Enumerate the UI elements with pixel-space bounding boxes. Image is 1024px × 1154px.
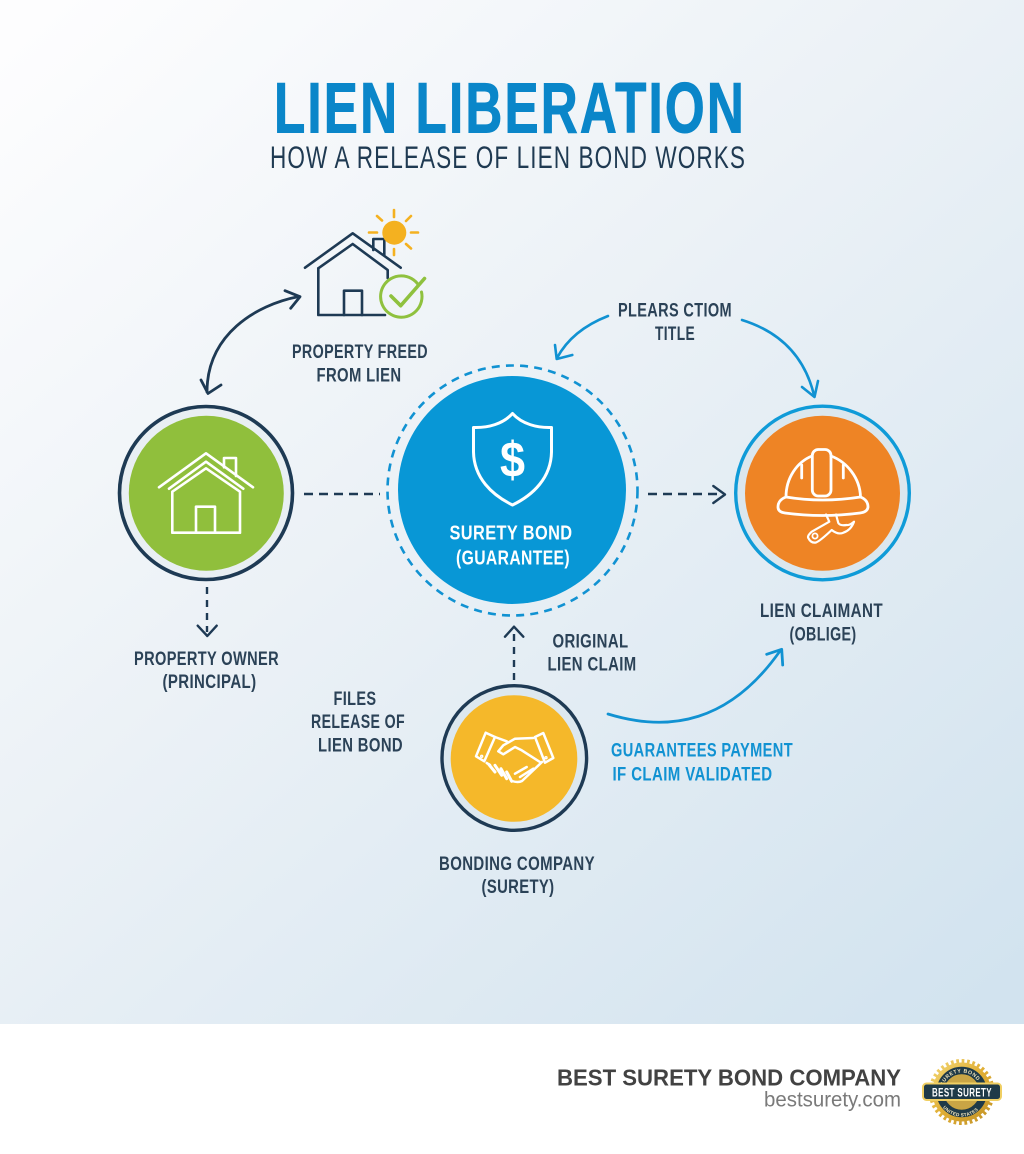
label: guarantees payment: IF CLAIM VALIDATED xyxy=(612,764,772,786)
logo: gold seal: BEST SURETY xyxy=(932,1086,992,1100)
dashed connector: owner to bond xyxy=(304,493,380,495)
label: property owner: (PRINCIPAL) xyxy=(162,671,256,693)
label: lien claimant: (OBLIGE) xyxy=(790,624,856,646)
arrow: surety up to bond xyxy=(505,627,523,680)
logo: gold seal: UNITED STATES xyxy=(943,1106,978,1116)
arrow: bond to claimant xyxy=(648,486,725,503)
label: clear title: PLEARS CTIOM xyxy=(618,300,732,322)
label: surety bond: (GUARANTEE) xyxy=(456,546,570,570)
label: bonding company: (SURETY) xyxy=(482,876,554,898)
label: surety bond xyxy=(450,522,572,570)
label: bonding company: BONDING COMPANY xyxy=(439,853,595,875)
label: lien claimant xyxy=(760,600,883,646)
arrow: title to claimant xyxy=(742,320,818,397)
icon: hard hat and wrench xyxy=(778,450,868,543)
arrow: owner to freed property xyxy=(201,291,300,394)
arrow: surety to claimant xyxy=(608,649,783,722)
label: property freed: PROPERTY FREED xyxy=(292,341,428,363)
label: clear title xyxy=(618,300,732,345)
label: files release: LIEN BOND xyxy=(318,734,403,756)
label: guarantees payment: GUARANTEES PAYMENT xyxy=(611,740,793,762)
node: property owner xyxy=(120,406,292,580)
node: lien claimant xyxy=(736,406,909,580)
icon: house xyxy=(159,453,253,533)
icon: shield with dollar xyxy=(474,414,552,505)
label: original lien claim xyxy=(548,630,636,676)
label: original lien claim: ORIGINAL xyxy=(552,630,628,652)
footer xyxy=(557,1059,1002,1125)
label: guarantees payment xyxy=(611,740,793,786)
arrow: owner down to label xyxy=(198,587,217,636)
node: bonding company xyxy=(442,686,587,830)
logo: gold seal: SURETY BOND xyxy=(940,1068,980,1082)
icon: shield with dollar: $ xyxy=(500,432,525,488)
icon: freed house with sun and check xyxy=(305,210,424,317)
icon: handshake xyxy=(476,733,553,782)
label: lien claimant: LIEN CLAIMANT xyxy=(760,600,883,622)
label: property freed: FROM LIEN xyxy=(316,364,402,386)
node: surety bond xyxy=(388,366,638,616)
title: LIEN LIBERATION xyxy=(274,70,746,148)
footer url: bestsurety.com xyxy=(764,1088,901,1112)
footer company name: BEST SURETY BOND COMPANY xyxy=(557,1064,901,1090)
label: original lien claim: LIEN CLAIM xyxy=(548,654,636,676)
label: property owner: PROPERTY OWNER xyxy=(134,648,279,670)
label: surety bond: SURETY BOND xyxy=(450,522,572,544)
subtitle: HOW A RELEASE OF LIEN BOND WORKS xyxy=(270,139,746,175)
label: property freed xyxy=(292,341,428,386)
label: files release: FILES xyxy=(334,688,376,710)
label: property owner xyxy=(134,648,279,693)
label: files release: RELEASE OF xyxy=(311,711,405,733)
logo: gold seal xyxy=(922,1059,1002,1125)
arrow: title to surety bond xyxy=(555,316,608,359)
label: files release xyxy=(311,688,405,756)
label: bonding company xyxy=(439,853,595,898)
label: clear title: TITLE xyxy=(655,323,695,345)
